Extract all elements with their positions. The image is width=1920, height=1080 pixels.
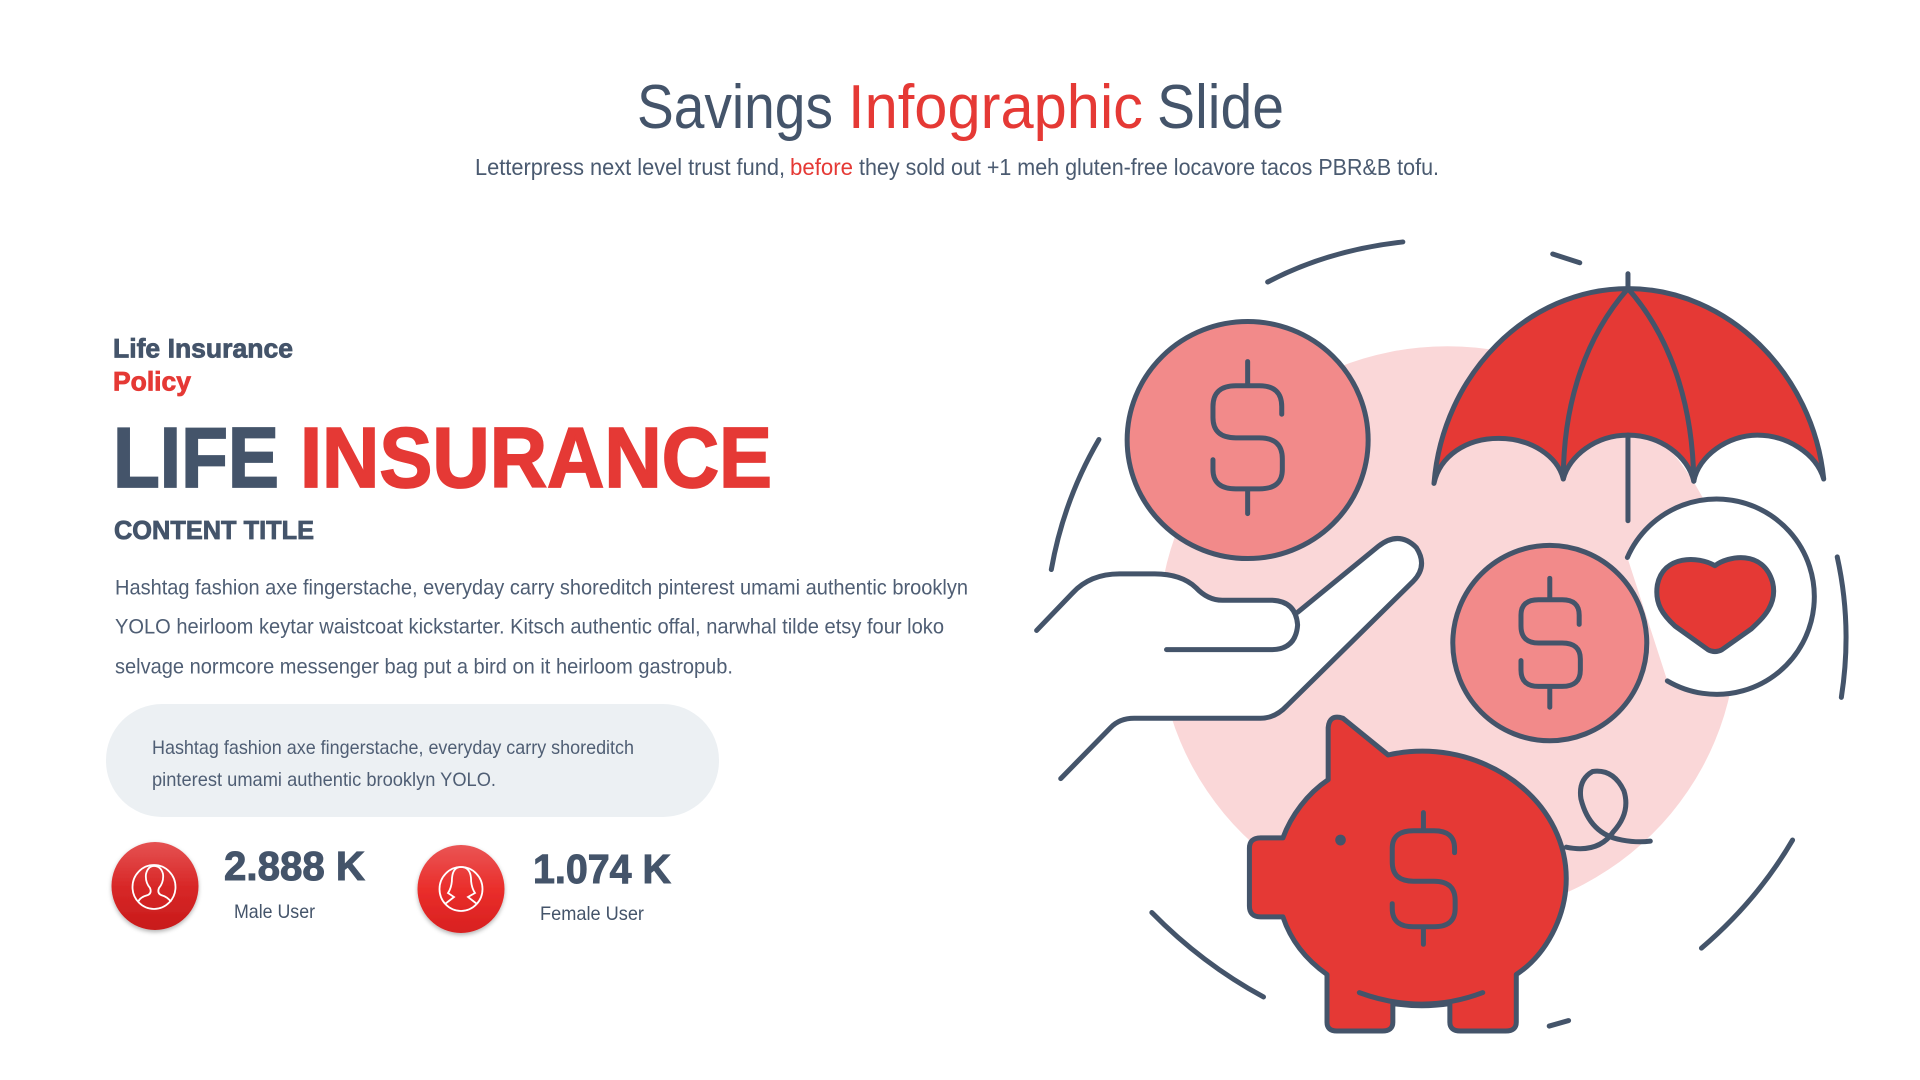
- icon: male user: [112, 842, 198, 930]
- title: [637, 73, 1284, 142]
- pink background circle: [1158, 346, 1737, 918]
- small heading: Policy: [113, 366, 191, 396]
- title: Infographic: [848, 73, 1143, 142]
- body paragraph: selvage normcore messenger bag put a bird on it heirloom gastropub.: [115, 654, 733, 678]
- subtitle: [475, 154, 1439, 180]
- stat: male user: [112, 842, 365, 930]
- subtitle: Letterpress next level trust fund,: [475, 154, 785, 180]
- main heading: [113, 411, 772, 506]
- value: 2.888 K: [224, 843, 365, 889]
- illustration: savings and insurance: [1034, 240, 1849, 1034]
- icon: heart in circle: [1627, 499, 1814, 694]
- main heading: LIFE: [113, 411, 279, 506]
- icon: female user: [418, 845, 504, 933]
- label: Male User: [234, 901, 315, 923]
- content title: CONTENT TITLE: [114, 515, 314, 545]
- body paragraph: Hashtag fashion axe fingerstache, everyday carry shoreditch pinterest umami authentic brooklyn: [115, 576, 968, 600]
- icon: large dollar coin: [1127, 322, 1368, 559]
- callout pill: pinterest umami authentic brooklyn YOLO.: [152, 769, 496, 791]
- value: 1.074 K: [533, 846, 671, 892]
- icon: piggy bank: [1249, 717, 1650, 1031]
- panel: left content: [106, 334, 968, 933]
- icon: small dollar coin: [1453, 545, 1647, 741]
- icon: hand: [1037, 539, 1422, 779]
- body paragraph: [115, 576, 968, 678]
- label: Female User: [540, 903, 644, 925]
- title: Slide: [1157, 73, 1284, 142]
- main heading: INSURANCE: [300, 411, 772, 506]
- small heading: [113, 334, 293, 396]
- subtitle: before: [790, 154, 853, 180]
- icon: umbrella: [1434, 274, 1824, 521]
- callout pill: Hashtag fashion axe fingerstache, everyday carry shoreditch: [152, 737, 634, 759]
- dashed ring: [1051, 242, 1846, 1026]
- small heading: Life Insurance: [113, 334, 293, 364]
- body paragraph: YOLO heirloom keytar waistcoat kickstarter. Kitsch authentic offal, narwhal tilde etsy four loko: [115, 614, 944, 638]
- callout pill: [106, 704, 719, 817]
- subtitle: they sold out +1 meh gluten-free locavore tacos PBR&B tofu.: [859, 154, 1439, 180]
- stat: female user: [418, 845, 671, 933]
- title: Savings: [637, 73, 833, 142]
